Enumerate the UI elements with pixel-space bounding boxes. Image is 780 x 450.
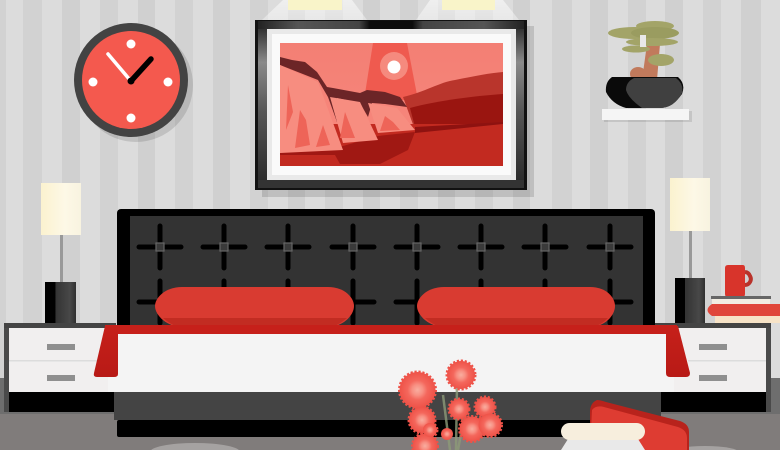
books and mug	[708, 265, 780, 323]
pot	[606, 77, 683, 108]
wall clock	[74, 23, 193, 142]
flowers	[399, 360, 502, 450]
floor	[0, 378, 780, 450]
floor cushions	[561, 400, 689, 450]
mattress	[108, 333, 674, 392]
white cushion	[561, 423, 645, 450]
right bedside lamp	[670, 178, 710, 323]
right pillow	[417, 287, 615, 327]
left bedside lamp	[41, 183, 81, 323]
shelf	[602, 109, 692, 122]
left pillow	[155, 287, 354, 327]
left nightstand	[4, 323, 116, 412]
right nightstand	[655, 323, 771, 412]
framed picture	[255, 20, 534, 197]
picture light cones	[262, 0, 519, 20]
bed	[94, 209, 690, 437]
wall shelf with bonsai	[602, 21, 692, 122]
red sheet	[105, 325, 677, 334]
mug	[725, 265, 751, 297]
bonsai tree	[608, 21, 679, 81]
base	[114, 392, 661, 420]
red cushion	[590, 400, 689, 450]
painting: red landscape	[280, 43, 503, 166]
headboard	[117, 209, 655, 329]
books stack	[708, 296, 780, 323]
right drape	[666, 326, 690, 377]
left drape	[94, 326, 118, 377]
